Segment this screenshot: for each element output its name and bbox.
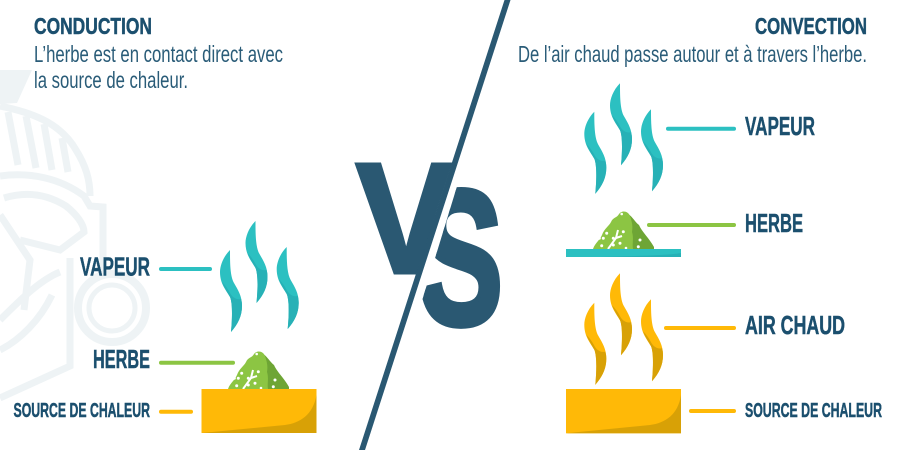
icon: teal plate: [566, 249, 681, 257]
VS title: [354, 162, 500, 329]
label: herbe: HERBE: [745, 208, 803, 238]
icon: heat source: [566, 389, 681, 433]
watermark: spartan helmet: [0, 70, 146, 398]
label: vapeur: VAPEUR: [745, 111, 815, 141]
label: vapeur: VAPEUR: [80, 252, 150, 282]
heading: conduction: CONDUCTION: [34, 13, 152, 39]
label: air chaud: AIR CHAUD: [745, 310, 845, 340]
icon: hot air wisps: [584, 273, 663, 385]
VS title: S: [419, 150, 503, 365]
icon: vapour wisps: [584, 83, 663, 194]
text: conduction description: la source de chaleur.: [34, 67, 188, 93]
label: herbe: HERBE: [93, 344, 150, 374]
divider slash: [359, 0, 510, 450]
icon: herb pile: [228, 352, 289, 389]
text: conduction description: [34, 41, 283, 93]
convection diagram: [566, 83, 882, 433]
VS title: V: [356, 132, 456, 306]
icon: vapour wisps: [220, 221, 299, 332]
icon: heat source: [202, 389, 316, 433]
conduction diagram: [14, 221, 316, 433]
text: conduction description: L’herbe est en contact direct avec: [34, 41, 283, 67]
label: source de chaleur: SOURCE DE CHALEUR: [14, 400, 150, 422]
label: herbe: [93, 344, 233, 374]
icon: herb pile: [593, 212, 654, 249]
